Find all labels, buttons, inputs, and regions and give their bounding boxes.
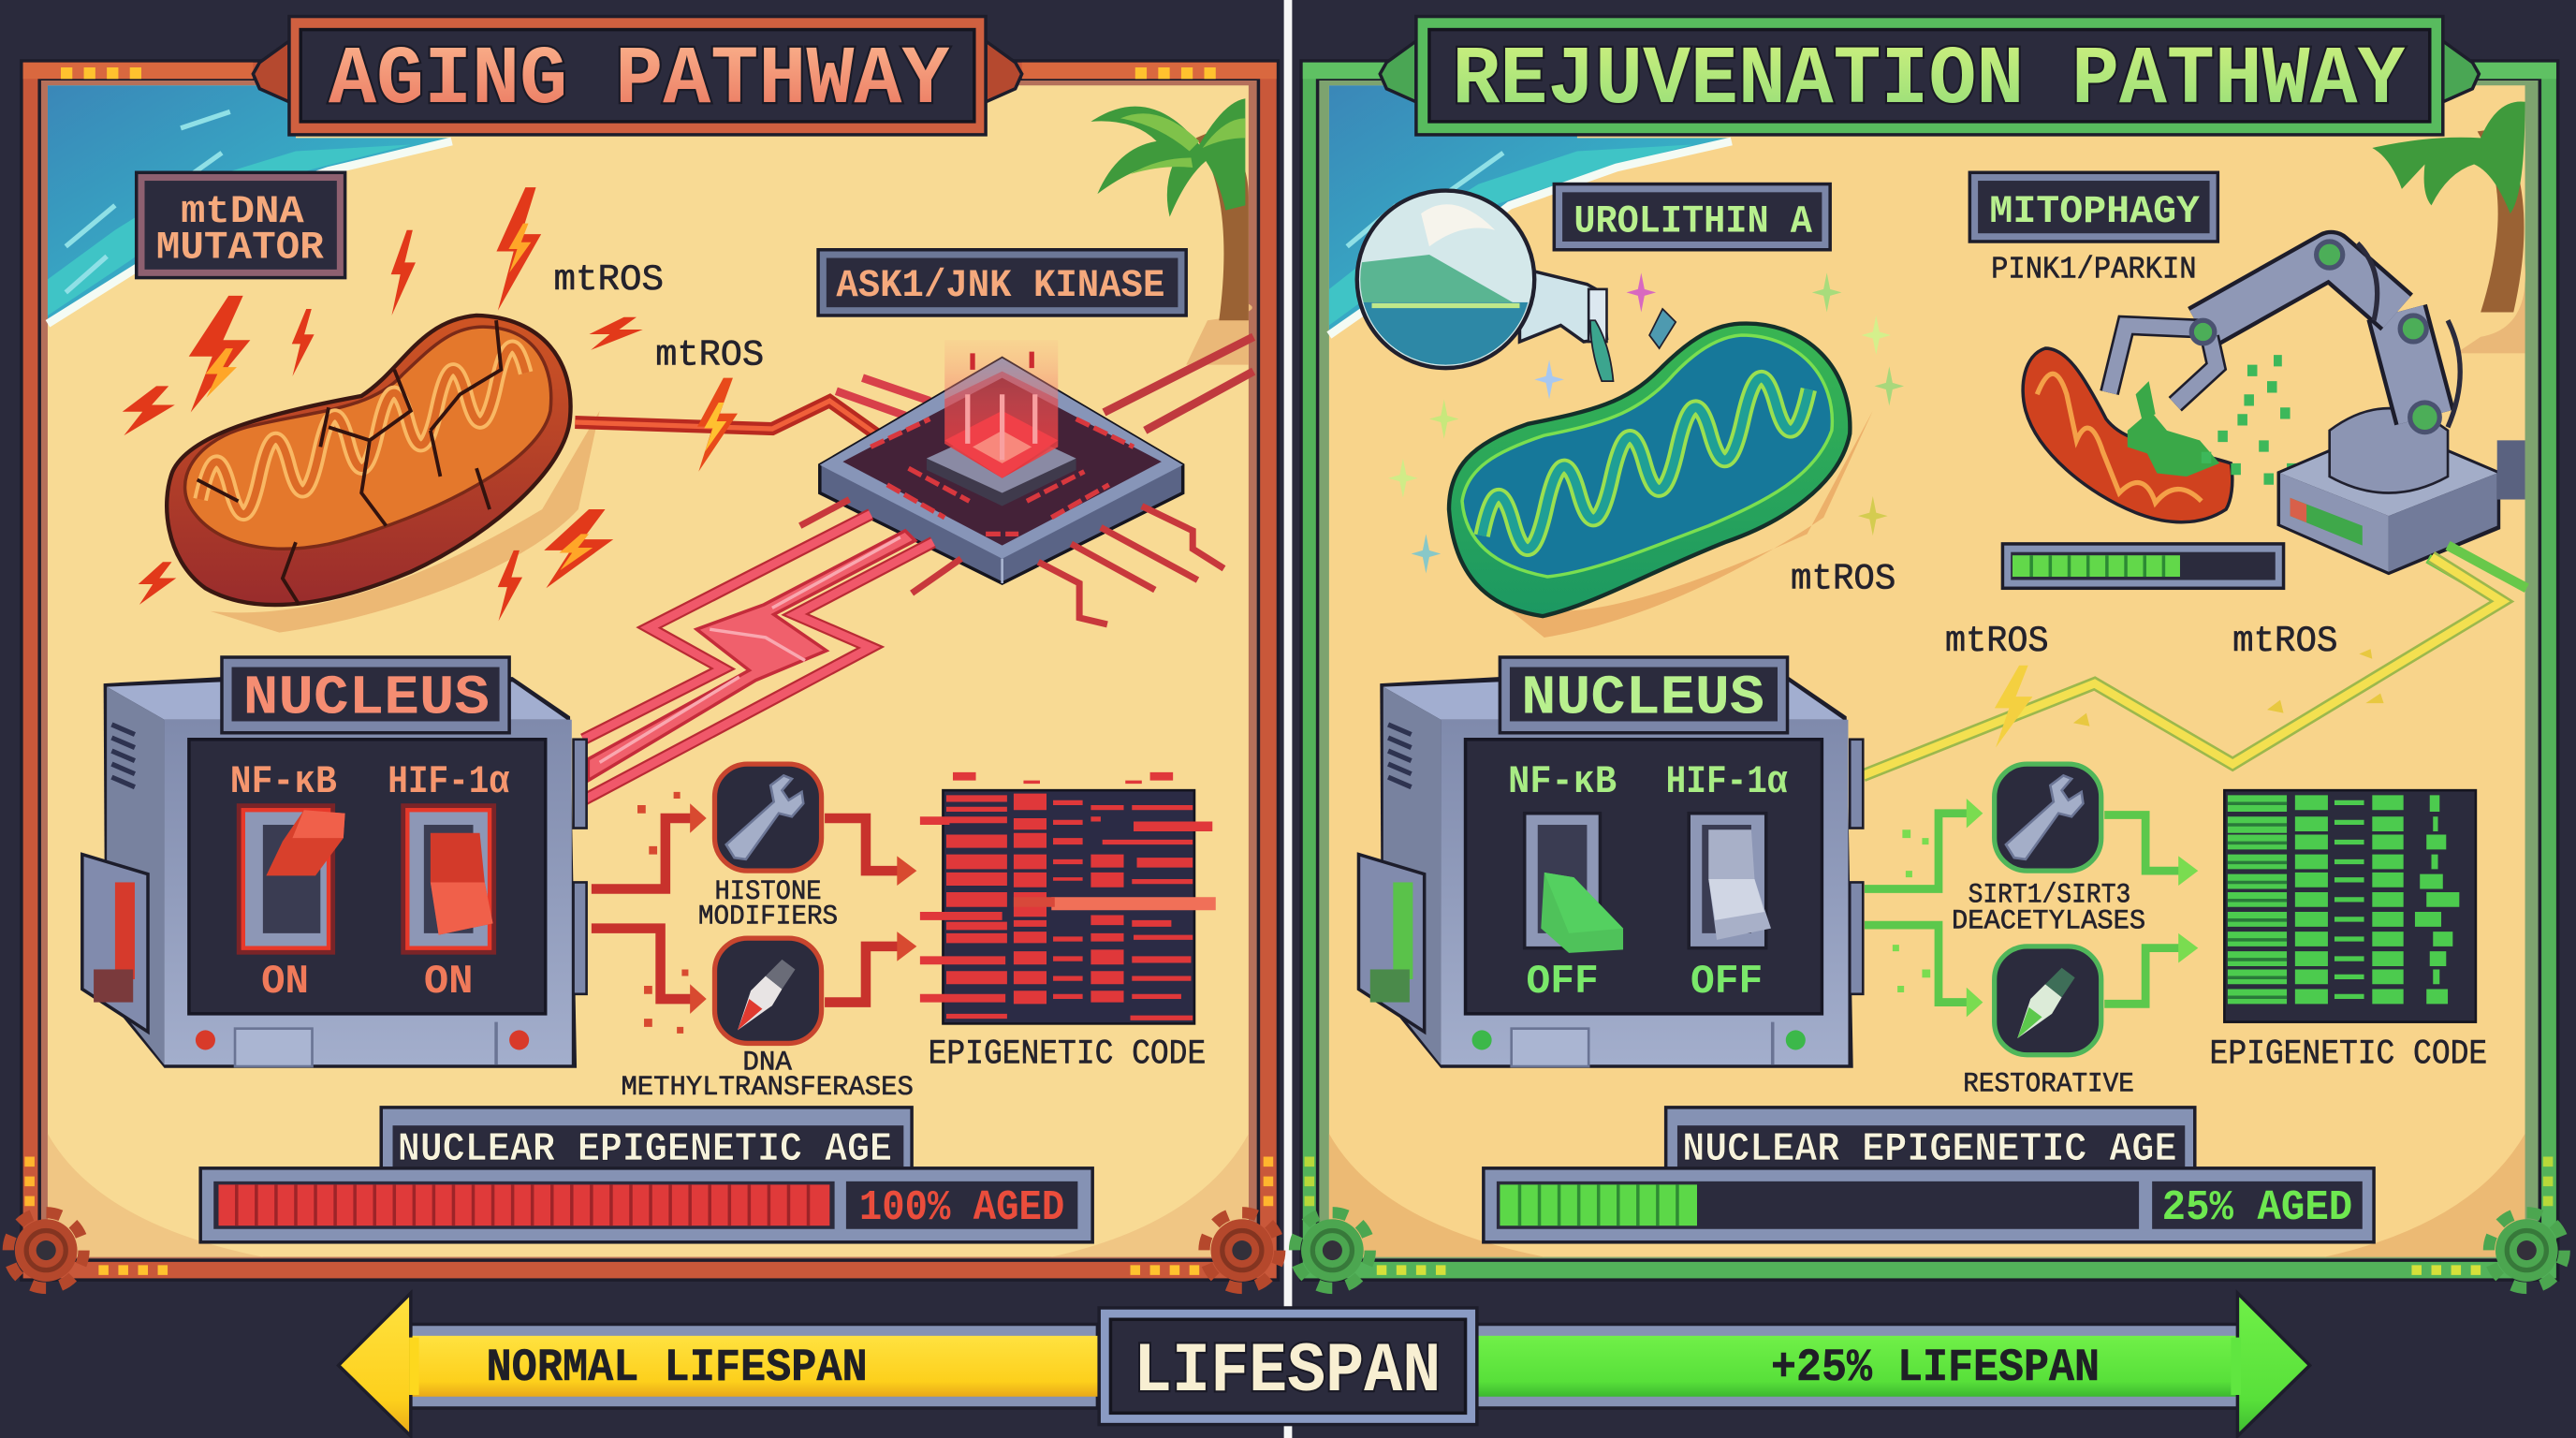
title: rejuvenation pathway	[1380, 15, 2479, 137]
icon: dropper restorative	[1995, 946, 2101, 1055]
beach sea: aging	[48, 85, 452, 324]
palm tree: rejuvenation	[2372, 102, 2525, 353]
panel: rejuvenation pathway	[1295, 15, 2565, 1288]
label: sirt1/sirt3 deacetylases: SIRT1/SIRT3	[1969, 879, 2130, 911]
switch: HIF-1a on	[401, 803, 496, 955]
label: HIF-1a green: HIF-1α	[1666, 759, 1788, 804]
switch: NF-kB on	[237, 803, 345, 955]
switch: NF-kB off	[1525, 814, 1623, 953]
label: off state right: OFF	[1690, 959, 1763, 1005]
icon: wrench histone modifiers	[714, 764, 822, 871]
label: nucleus	[222, 657, 509, 733]
mitochondrion: damaged	[167, 315, 600, 633]
gauge title: NUCLEAR EPIGENETIC AGE	[398, 1126, 892, 1173]
label: mtROS second: mtROS	[655, 335, 764, 376]
label: mtROS healthy: mtROS	[1791, 558, 1895, 599]
label: urolithin A	[1554, 184, 1830, 250]
label: DNA methyltransferases	[621, 1047, 914, 1103]
nucleus: aging	[82, 657, 587, 1068]
arrow: signal wires from chip to nucleus	[583, 514, 933, 800]
arrow: normal lifespan	[339, 1293, 1101, 1436]
label: mtROS reduced second: mtROS	[2232, 621, 2337, 662]
label: PINK1/PARKIN: PINK1/PARKIN	[1991, 253, 2197, 288]
label: restorative: RESTORATIVE	[1963, 1067, 2134, 1099]
label: mtROS reduced: mtROS	[1945, 621, 2049, 662]
arrow: +25% lifespan	[1475, 1293, 2310, 1436]
icon: wrench sirtuins	[1995, 764, 2101, 871]
label: mtDNA mutator	[137, 172, 345, 278]
palm tree: aging	[1090, 98, 1252, 365]
gauge title	[381, 1108, 912, 1173]
progress bar: mitophagy	[2001, 542, 2285, 590]
label: sirt1/sirt3 deacetylases	[1952, 879, 2145, 937]
title: aging pathway: AGING PATHWAY	[329, 35, 950, 127]
label: mtDNA mutator: MUTATOR	[156, 226, 325, 271]
mitochondrion: damaged being recycled	[2023, 348, 2297, 522]
gauge title green: NUCLEAR EPIGENETIC AGE	[1682, 1126, 2176, 1173]
icon: dropper DNA methyltransferases	[714, 938, 822, 1043]
sparkles	[1388, 272, 1904, 574]
label: NF-kB green: NF-κB	[1508, 759, 1617, 804]
label: histone modifiers: MODIFIERS	[698, 900, 838, 932]
mitochondrion: healthy	[1449, 324, 1873, 638]
label: mtROS: mtROS	[554, 259, 664, 301]
label: on state right: ON	[424, 959, 474, 1005]
label: on state left: ON	[261, 959, 309, 1005]
lifespan bar	[339, 1293, 2310, 1436]
icon: gears aging frame	[8, 1212, 1280, 1288]
chart: corrupted epigenetic code	[920, 772, 1216, 1023]
label: ASK1/JNK kinase	[818, 250, 1186, 315]
label: mitophagy	[1969, 172, 2217, 242]
gauge: nuclear epigenetic age 25%	[1484, 1108, 2374, 1242]
flask: urolithin A	[1357, 191, 1676, 381]
arrow: ROS wire from mitochondrion to chip	[575, 378, 929, 472]
label: sirt1/sirt3 deacetylases: DEACETYLASES	[1952, 905, 2145, 937]
panel frame: rejuvenation	[1299, 59, 2559, 1282]
label: mitophagy: MITOPHAGY	[1989, 189, 2201, 234]
title: aging pathway	[253, 15, 1022, 137]
label: nucleus green	[1500, 657, 1788, 733]
label: histone modifiers: HISTONE	[714, 875, 822, 907]
icon: lightning bolts	[123, 187, 643, 621]
label: urolithin A: UROLITHIN A	[1573, 198, 1813, 243]
label: histone modifiers	[698, 875, 838, 932]
arrows: nucleus to enzymes to code green	[1865, 799, 2198, 1017]
label: HIF-1a: HIF-1α	[388, 759, 510, 804]
gauge: nuclear epigenetic age 100%	[200, 1108, 1092, 1242]
label: NF-kB: NF-κB	[230, 759, 337, 804]
label: nucleus: NUCLEUS	[243, 667, 490, 730]
label: epigenetic code aging: EPIGENETIC CODE	[929, 1035, 1206, 1075]
panel: aging pathway	[8, 15, 1280, 1288]
chip: ASK1/JNK kinase	[800, 337, 1253, 624]
chart: restored epigenetic code	[2224, 790, 2476, 1022]
beach sea: rejuvenation	[1329, 85, 1732, 335]
label: nucleus green: NUCLEUS	[1521, 667, 1764, 730]
label: lifespan	[1099, 1308, 1477, 1425]
label: epigenetic code rejuvenation: EPIGENETIC CODE	[2210, 1035, 2487, 1075]
label: DNA methyltransferases: DNA	[742, 1047, 792, 1078]
label: mtDNA mutator: mtDNA	[181, 189, 304, 234]
label: off state left: OFF	[1526, 959, 1599, 1005]
gauge: nuclear epigenetic age 25%: 25% AGED	[2162, 1183, 2352, 1232]
label: +25% lifespan: +25% LIFESPAN	[1771, 1342, 2100, 1394]
panel frame: aging	[20, 59, 1280, 1282]
arrows: nucleus to enzymes to code	[592, 792, 916, 1034]
switch: HIF-1a off	[1689, 814, 1771, 948]
nucleus: rejuvenation	[1358, 657, 1863, 1068]
center divider	[1284, 0, 1292, 1438]
title: rejuvenation pathway: REJUVENATION PATHWAY	[1453, 35, 2406, 127]
arrow: weak ROS wire to nucleus	[1863, 546, 2526, 775]
gauge title green	[1666, 1108, 2195, 1173]
robot arm	[2110, 242, 2525, 575]
label: normal lifespan: NORMAL LIFESPAN	[487, 1342, 868, 1394]
icon: gears rejuvenation frame	[1295, 1212, 2565, 1288]
label: ASK1/JNK kinase: ASK1/JNK KINASE	[836, 263, 1164, 308]
label: DNA methyltransferases: METHYLTRANSFERASES	[621, 1071, 914, 1103]
label: lifespan: LIFESPAN	[1134, 1331, 1441, 1412]
gauge: nuclear epigenetic age 100%: 100% AGED	[859, 1183, 1064, 1232]
